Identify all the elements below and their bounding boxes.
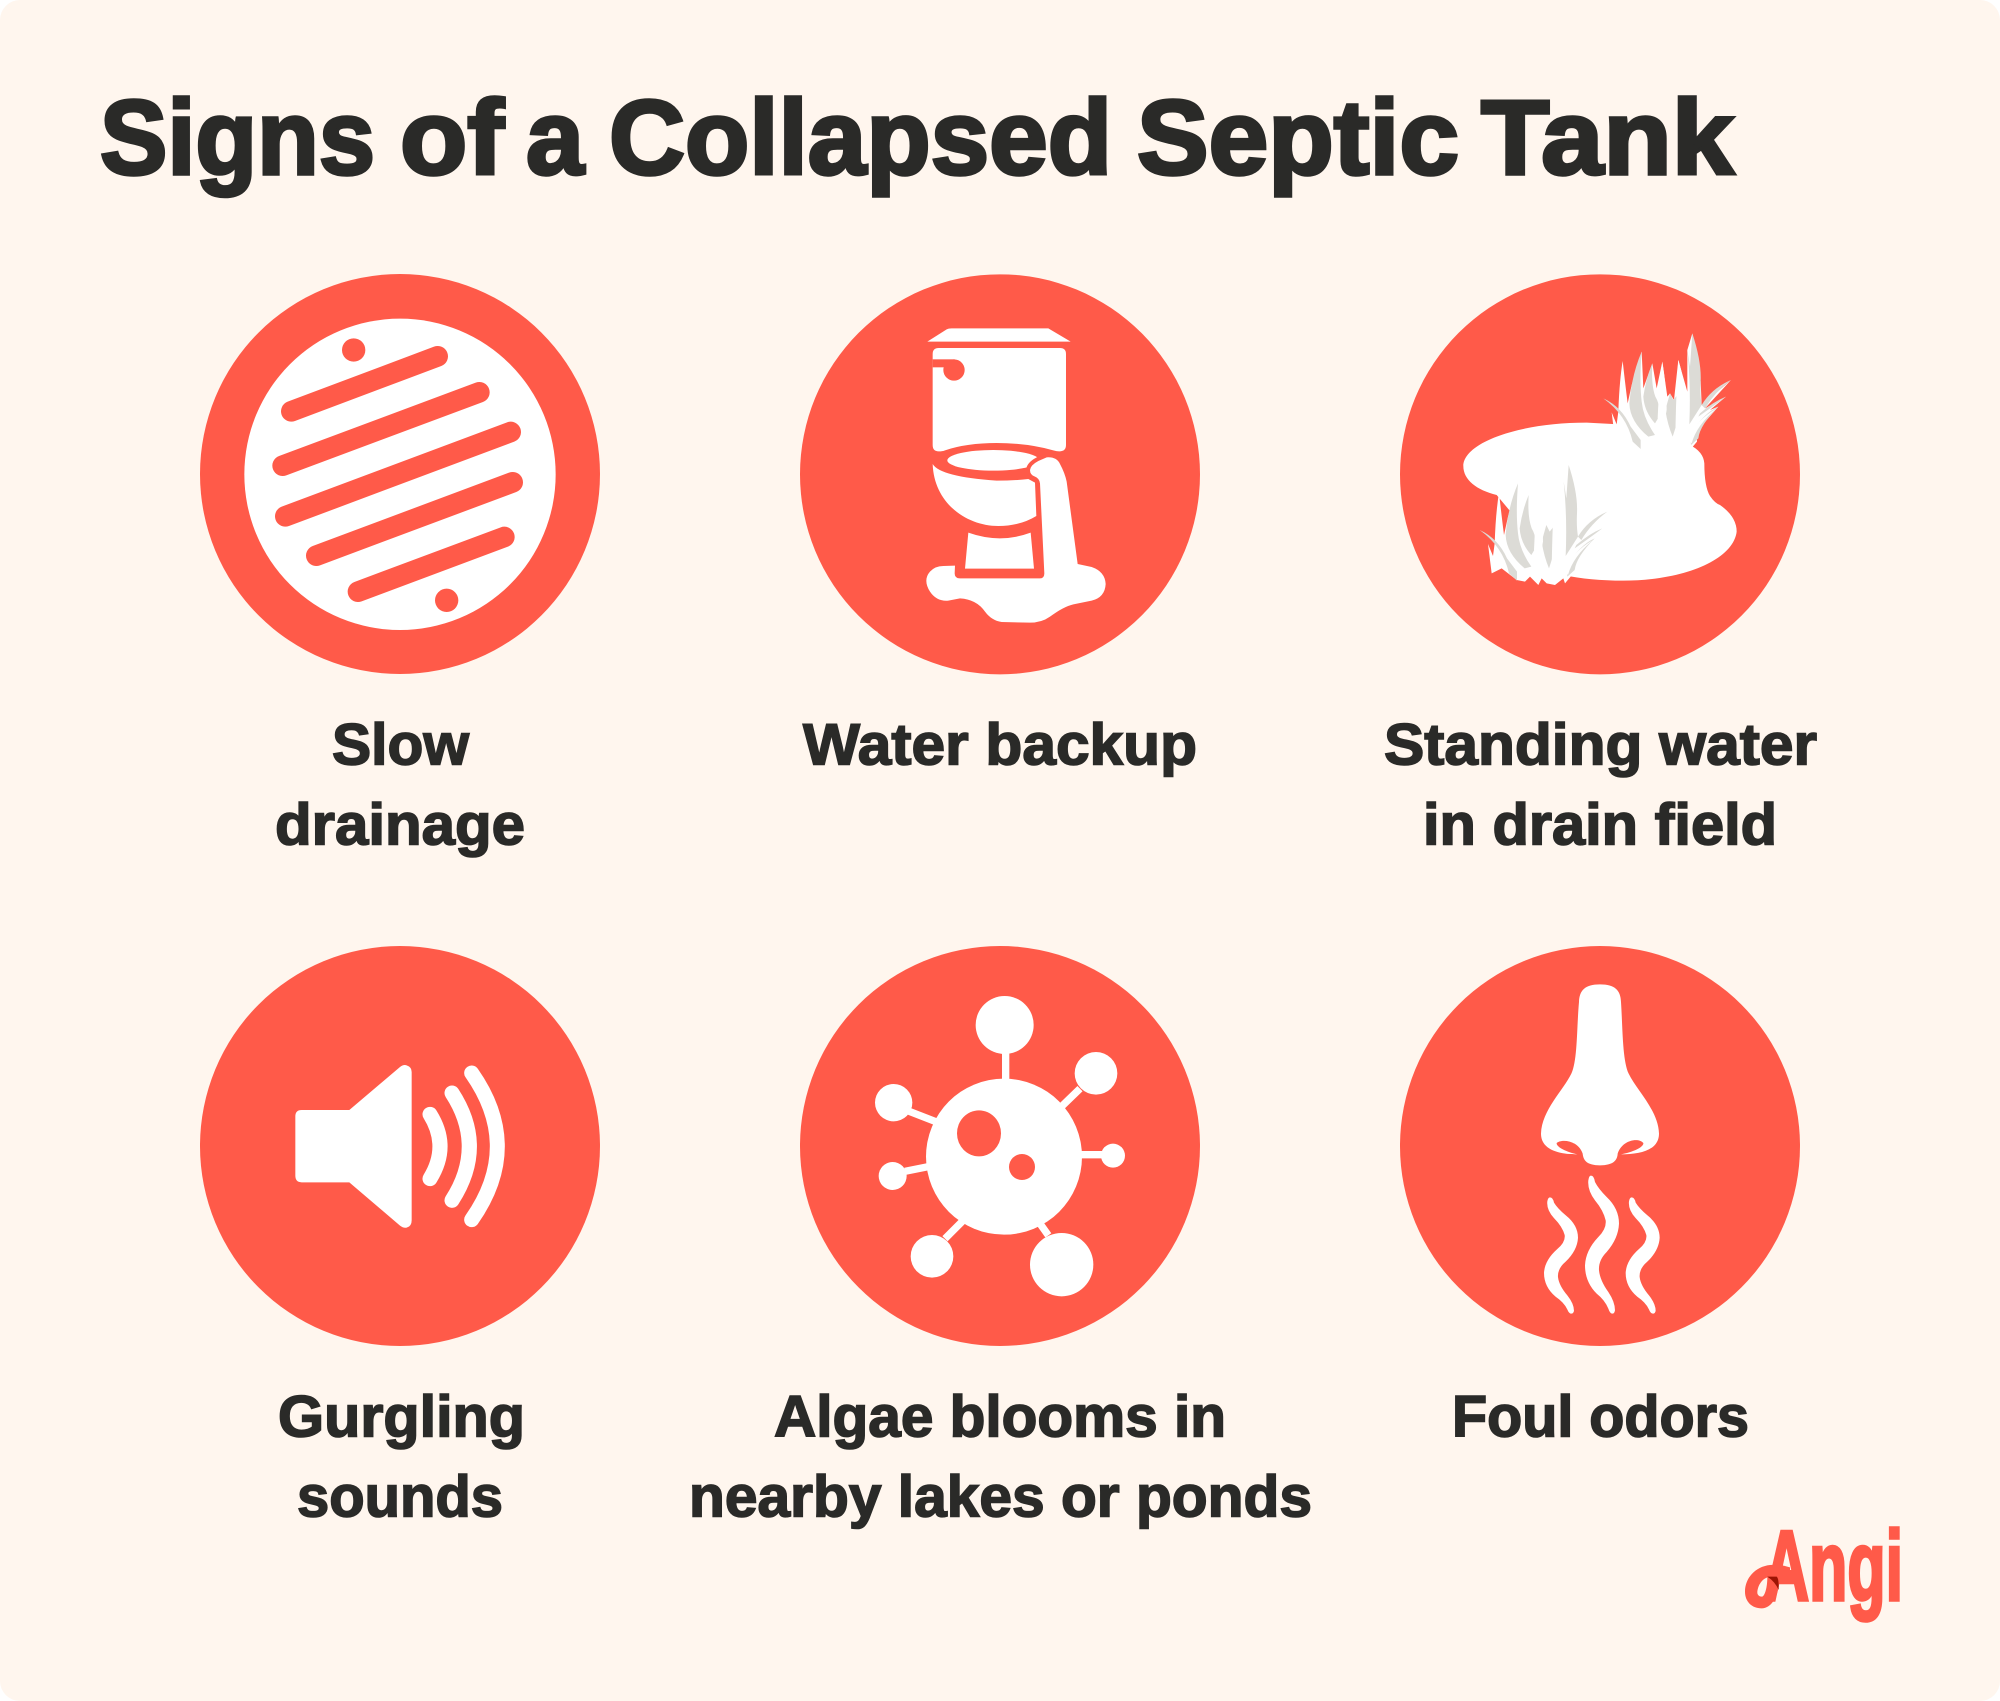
- label: water backup: Water backup: [803, 712, 1197, 778]
- label: gurgling sounds: Gurgling: [278, 1384, 525, 1450]
- label: slow drainage: Slow: [332, 712, 470, 778]
- panel: standing water in drain field: [1384, 274, 1817, 858]
- title: Septic: [1137, 79, 1459, 197]
- title: Signs: [100, 79, 375, 197]
- panel: water backup: [800, 274, 1200, 778]
- title: of: [400, 79, 505, 197]
- panel: algae blooms: [689, 946, 1312, 1530]
- label: slow drainage: [275, 712, 525, 858]
- icon: overflowing toilet: [800, 274, 1200, 674]
- icon: speaker: [200, 946, 600, 1346]
- label: standing water in drain field: Standing water: [1384, 712, 1817, 778]
- label: slow drainage: drainage: [275, 792, 525, 858]
- label: standing water in drain field: in drain field: [1423, 792, 1777, 858]
- label: gurgling sounds: [278, 1384, 525, 1530]
- label: standing water in drain field: [1384, 712, 1817, 858]
- panel: foul odors: [1400, 946, 1800, 1450]
- title: Tank: [1481, 79, 1735, 197]
- lower grass tuft: [1480, 465, 1607, 585]
- panel: slow drainage: [200, 274, 600, 858]
- upper grass tuft: [1603, 333, 1731, 453]
- icon: drain grate: [200, 274, 600, 674]
- label: gurgling sounds: sounds: [297, 1464, 503, 1530]
- title: Collapsed: [609, 79, 1112, 197]
- title: a: [526, 79, 585, 197]
- label: foul odors: Foul odors: [1452, 1384, 1749, 1450]
- logo: Angi: Angi: [1764, 1510, 1903, 1621]
- icon: nose with odor waves: [1400, 946, 1800, 1346]
- logo: Angi: [1745, 1510, 1903, 1621]
- label: algae blooms: [689, 1384, 1312, 1530]
- icon: algae cell: [800, 946, 1200, 1346]
- icon: pond with grass: [1400, 274, 1800, 674]
- label: algae blooms: nearby lakes or ponds: [689, 1464, 1312, 1530]
- panel: gurgling sounds: [200, 946, 600, 1530]
- label: algae blooms: Algae blooms in: [774, 1384, 1226, 1450]
